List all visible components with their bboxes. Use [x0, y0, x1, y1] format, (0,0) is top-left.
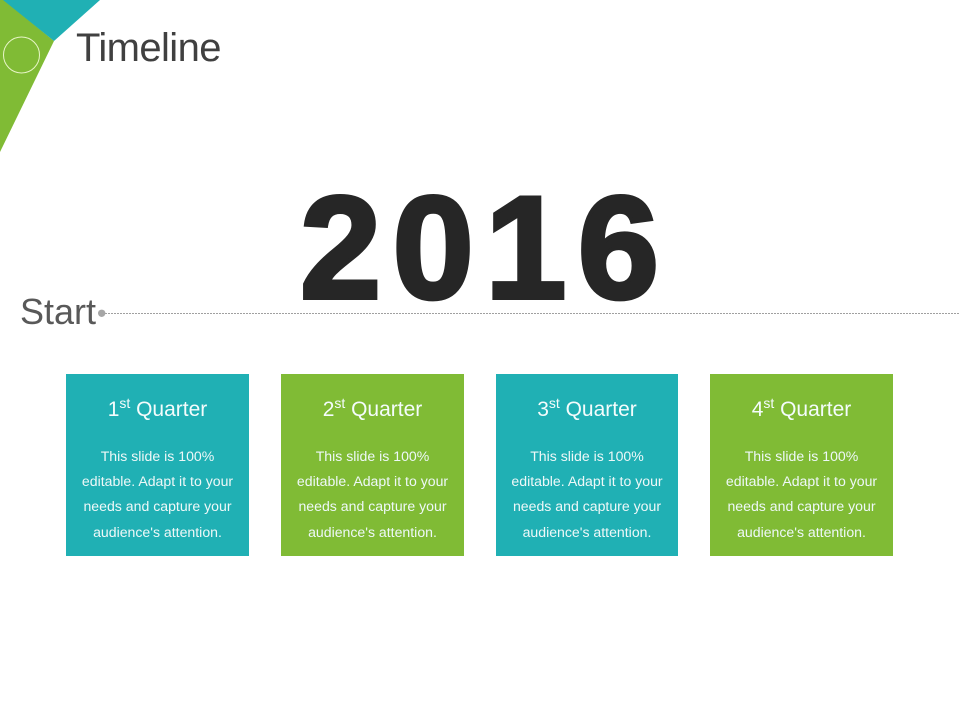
panel: 3rd quarter: [496, 374, 678, 556]
timeline line: [98, 310, 959, 317]
panel: 1st quarter: audience's attention.: [93, 524, 222, 540]
panel: 4th quarter: 4st Quarter: [752, 395, 851, 421]
panel: 3rd quarter: audience's attention.: [523, 524, 651, 540]
panel: 1st quarter: 1st Quarter: [108, 395, 207, 421]
panel: 2nd quarter: editable. Adapt it to your: [297, 473, 448, 489]
corner decoration: [0, 0, 100, 152]
panel: 1st quarter: needs and capture your: [83, 498, 232, 514]
panel: 2nd quarter: [281, 374, 464, 556]
panel: 1st quarter: This slide is 100%: [101, 448, 214, 464]
panel: 2nd quarter: This slide is 100%: [316, 448, 429, 464]
panel: 3rd quarter: needs and capture your: [513, 498, 661, 514]
panel: 3rd quarter: editable. Adapt it to your: [511, 473, 663, 489]
panel: 4th quarter: This slide is 100%: [745, 448, 858, 464]
panel: 2nd quarter: 2st Quarter: [323, 395, 422, 421]
panel: 4th quarter: [710, 374, 893, 556]
title: Timeline: [76, 26, 221, 70]
panel: 2nd quarter: needs and capture your: [298, 498, 447, 514]
panel: 3rd quarter: This slide is 100%: [530, 448, 644, 464]
start label: Start: [20, 291, 96, 332]
panel: 4th quarter: needs and capture your: [727, 498, 876, 514]
panel: 3rd quarter: 3st Quarter: [537, 395, 637, 421]
panel: 2nd quarter: audience's attention.: [308, 524, 437, 540]
panel: 4th quarter: audience's attention.: [737, 524, 866, 540]
panel: 1st quarter: [66, 374, 249, 556]
panel: 4th quarter: editable. Adapt it to your: [726, 473, 877, 489]
year heading: 2016: [300, 166, 670, 329]
panel: 1st quarter: editable. Adapt it to your: [82, 473, 233, 489]
